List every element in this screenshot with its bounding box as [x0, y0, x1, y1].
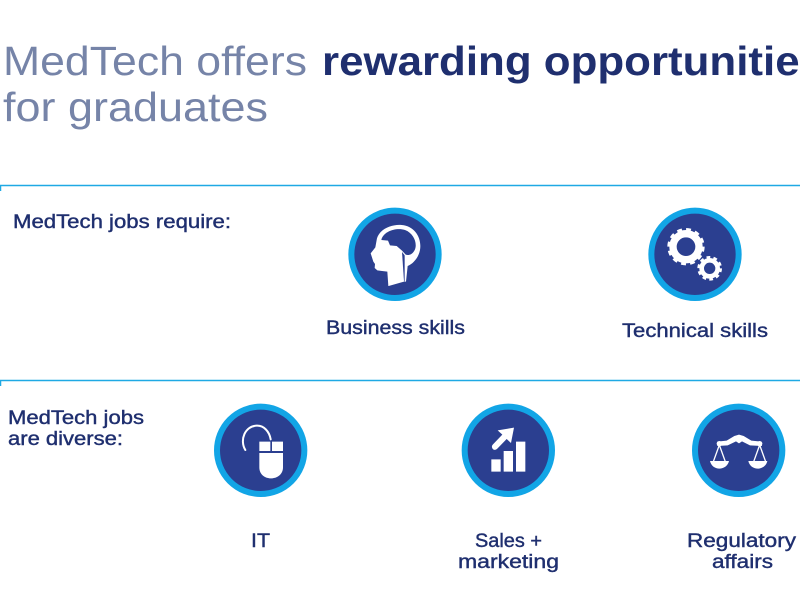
- heading: jobs are diverse: are diverse:: [8, 429, 123, 450]
- icon: gears: [651, 211, 739, 298]
- panel: MedTech jobs are diverse: [8, 407, 797, 573]
- label: business skills: Business skills: [326, 318, 465, 339]
- title: rewarding opportunities: [322, 38, 800, 84]
- title: MedTech offers: [3, 38, 307, 84]
- icon: head with brain: [351, 211, 439, 298]
- label: sales and marketing: [458, 531, 559, 573]
- label: regulatory affairs: affairs: [712, 552, 773, 573]
- icon: growth chart: [465, 407, 552, 494]
- heading: jobs are diverse: MedTech jobs: [8, 408, 144, 429]
- label: IT: IT: [251, 531, 270, 552]
- label: regulatory affairs: Regulatory: [687, 531, 797, 552]
- title: for graduates: [3, 84, 268, 130]
- label: sales and marketing: Sales +: [475, 531, 542, 552]
- panel: MedTech jobs require: [13, 211, 768, 342]
- heading: jobs are diverse: [8, 408, 144, 450]
- label: technical skills: Technical skills: [622, 321, 768, 342]
- label: regulatory affairs: [687, 531, 797, 573]
- title: [3, 38, 800, 130]
- label: sales and marketing: marketing: [458, 552, 559, 573]
- heading: jobs require: MedTech jobs require:: [13, 212, 231, 233]
- icon: scales: [695, 407, 782, 494]
- icon: computer mouse: [217, 407, 304, 494]
